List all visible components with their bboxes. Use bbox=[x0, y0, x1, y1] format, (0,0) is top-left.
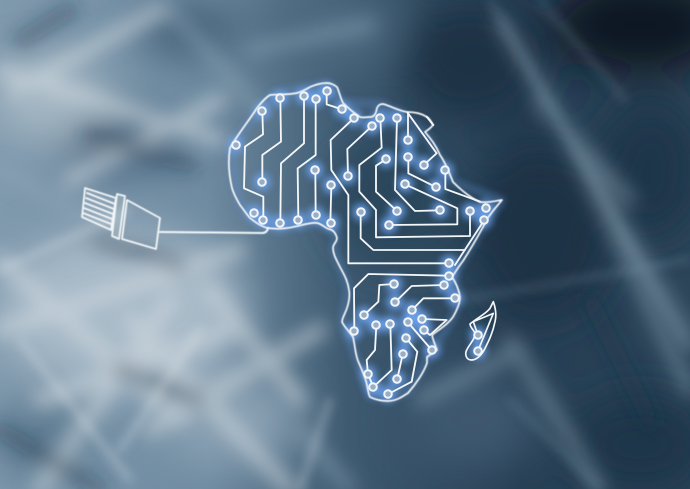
circuit nodes bbox=[232, 87, 490, 398]
map outline of Africa bbox=[229, 83, 502, 401]
map glow bbox=[228, 83, 502, 402]
icon: network cable plug bbox=[82, 188, 268, 249]
circuit traces: southern Africa bbox=[354, 274, 455, 394]
island of Madagascar bbox=[466, 302, 496, 360]
circuit traces: north Africa bbox=[244, 91, 484, 265]
